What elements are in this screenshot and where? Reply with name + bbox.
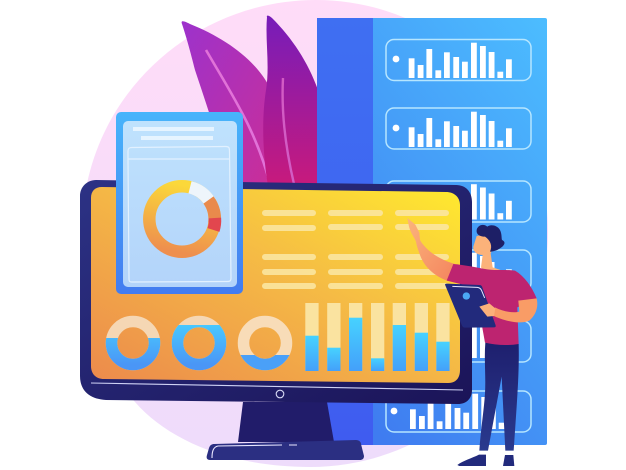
donut chart 1 [112,322,154,364]
chart row 5 [386,321,531,362]
power button [276,390,284,398]
screen [91,187,460,383]
chart row 2 [386,108,531,149]
background circle [82,0,548,467]
pants [479,343,519,451]
donut chart 3 [244,322,286,364]
chart row 4 [386,250,531,291]
hair [477,225,505,252]
chart row 3 [386,181,531,222]
character: man with tablet [407,218,537,466]
neck and face [473,233,501,272]
shoes [457,455,486,466]
icon: purple leaves [182,16,318,186]
illustration: analyst presenting dashboard [80,0,548,467]
screen text lines [265,213,446,286]
bar chart [305,303,450,371]
monitor stand [207,402,364,460]
shirt [447,264,537,345]
chart row 1 [386,40,531,80]
forearm [493,298,537,322]
inner frame [128,146,231,282]
donut chart [149,186,215,252]
tablet card with donut [116,112,243,294]
left leaf [182,21,279,186]
monitor [80,180,472,404]
header lines [133,129,214,138]
monitor bezel line [91,383,463,390]
donut chart 2 [178,322,220,364]
panel: server rack with chart rows [317,18,547,445]
chart row 6 [386,391,531,432]
raised arm [407,218,455,281]
hand [479,303,495,317]
handheld tablet [445,284,496,328]
right leaf [263,16,318,186]
